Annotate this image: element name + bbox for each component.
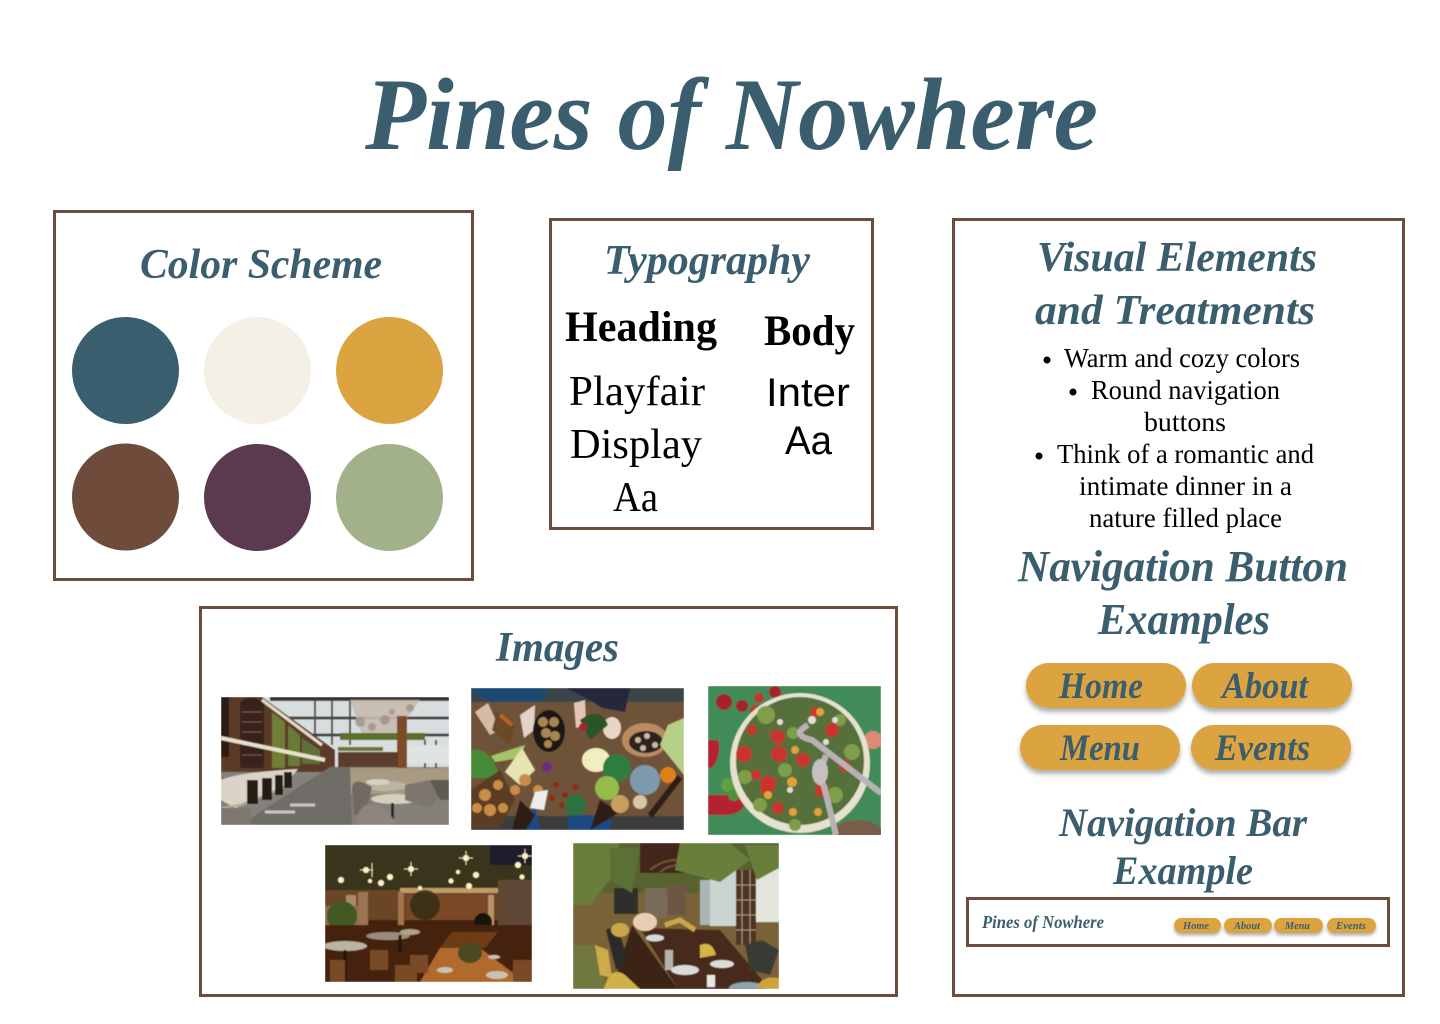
bullet list: nature filled place xyxy=(1089,503,1282,533)
heading: navigation bar example: Example xyxy=(1112,848,1253,893)
swatch: slate blue xyxy=(72,317,179,424)
bullet list: buttons xyxy=(1144,407,1226,437)
button: about: About xyxy=(1220,666,1310,707)
navbar logo: Pines of Nowhere xyxy=(981,912,1104,932)
navbar button: home: Home xyxy=(1182,920,1209,932)
heading: navigation button examples: Examples xyxy=(1097,595,1270,644)
swatch: sage xyxy=(336,444,443,551)
photo: leafy dining room xyxy=(573,843,779,994)
navbar button: home xyxy=(1174,918,1221,933)
heading font sample: Aa xyxy=(613,475,658,521)
heading: navigation button examples xyxy=(1017,542,1348,644)
navbar button: events xyxy=(1327,918,1376,933)
navbar button: menu xyxy=(1274,918,1323,933)
body font sample: Inter xyxy=(766,371,850,415)
navbar button: about: About xyxy=(1233,920,1261,932)
heading: visual elements and treatments: and Treatments xyxy=(1035,288,1315,334)
photo: vegetables on a wooden table xyxy=(471,688,684,830)
button: events xyxy=(1191,725,1351,770)
bullet list: intimate dinner in a xyxy=(1079,471,1292,501)
heading: images: Images xyxy=(495,625,619,671)
navbar button: about xyxy=(1224,918,1272,933)
body font sample: Aa xyxy=(785,419,833,463)
heading: navigation button examples: Navigation Button xyxy=(1017,542,1348,591)
swatch: plum xyxy=(204,444,311,551)
heading: visual elements and treatments xyxy=(1035,235,1317,334)
bullet list: Warm and cozy colors xyxy=(1064,343,1300,373)
swatch: mustard xyxy=(336,317,443,424)
bullet list xyxy=(1036,343,1314,533)
panel: visual elements xyxy=(954,220,1404,996)
photo: strawberry salad bowl xyxy=(708,686,882,844)
navbar button: events: Events xyxy=(1335,920,1366,932)
heading font sample: Playfair xyxy=(569,369,705,415)
button: events: Events xyxy=(1214,728,1310,769)
button: about xyxy=(1192,663,1352,708)
heading: color scheme: Color Scheme xyxy=(140,242,382,288)
swatch: cream xyxy=(204,317,311,424)
heading font sample: Heading xyxy=(565,304,717,351)
panel: typography xyxy=(550,220,872,528)
photo: greenhouse restaurant interior xyxy=(221,697,449,825)
heading: visual elements and treatments: Visual Elements xyxy=(1037,235,1317,281)
panel: images xyxy=(200,608,896,996)
body font sample xyxy=(764,308,855,463)
button: menu: Menu xyxy=(1059,728,1140,769)
heading font sample: Display xyxy=(570,422,702,468)
body font sample: Body xyxy=(764,308,855,355)
title: Pines of Nowhere xyxy=(364,58,1098,172)
heading font sample xyxy=(565,304,717,521)
button: home: Home xyxy=(1058,666,1143,707)
heading: typography: Typography xyxy=(604,238,810,284)
swatch: brown xyxy=(72,444,179,550)
bullet list: Think of a romantic and xyxy=(1057,439,1314,469)
navbar button: menu: Menu xyxy=(1284,920,1310,932)
panel: color scheme xyxy=(54,212,472,580)
navigation bar example xyxy=(968,898,1388,946)
bullet list: Round navigation xyxy=(1091,375,1280,405)
photo: string-lit patio xyxy=(323,845,532,982)
button: menu xyxy=(1020,725,1180,770)
heading: navigation bar example: Navigation Bar xyxy=(1058,800,1307,845)
button: home xyxy=(1026,663,1186,708)
heading: navigation bar example xyxy=(1058,800,1307,893)
